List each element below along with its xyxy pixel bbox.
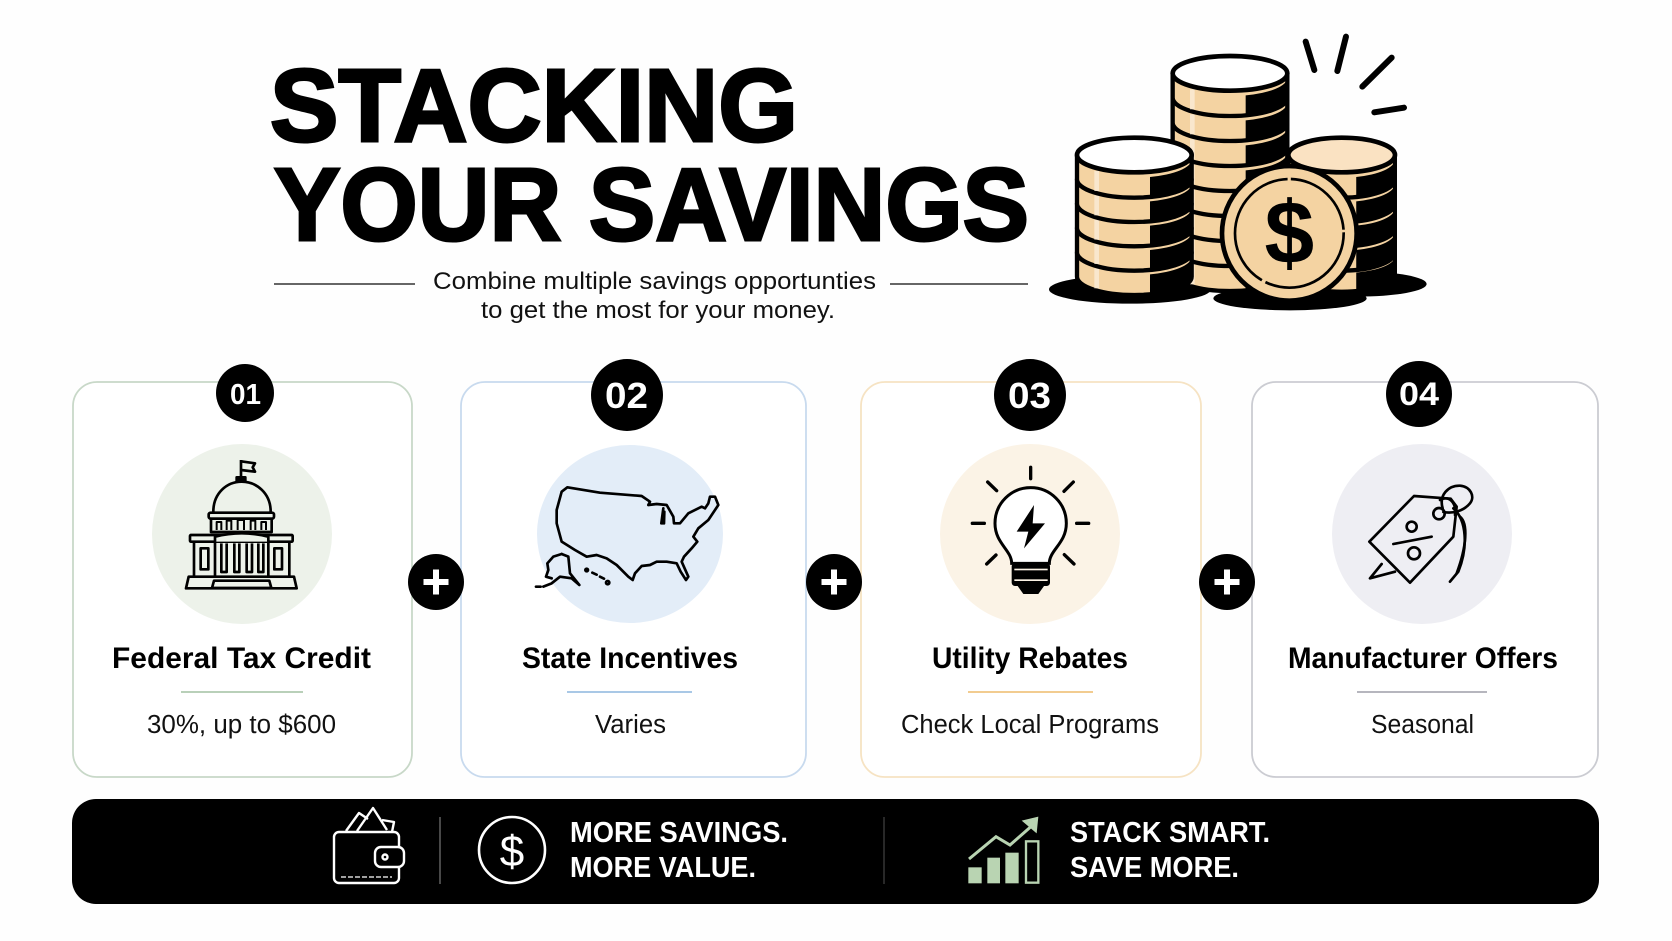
panel: Utility Rebates: [861, 359, 1201, 777]
slogan: stack smart: [1070, 817, 1270, 884]
icon: dollar circle: $: [500, 827, 524, 876]
number badge 01: 01: [230, 379, 261, 411]
card title: Federal Tax Credit: [112, 642, 371, 675]
plus connector 2: [806, 554, 862, 610]
icon: capitol building: [152, 444, 332, 624]
icon: wallet: [334, 808, 404, 883]
divider: [181, 691, 303, 693]
panel: State Incentives: [461, 359, 806, 777]
bottom banner: [72, 799, 1599, 904]
plus connector 1: [408, 554, 464, 610]
icon: coin stacks with dollar coin: [1049, 37, 1427, 310]
subtitle: to get the most for your money.: [481, 297, 835, 324]
title: [270, 48, 1029, 262]
icon: percent price tag: [1332, 444, 1512, 624]
card border: [861, 382, 1201, 777]
card border: [73, 382, 412, 777]
number badge 04: 04: [1399, 376, 1439, 412]
panel: Federal Tax Credit: [73, 364, 412, 777]
number badge 02: 02: [605, 375, 648, 416]
icon: US map: [536, 445, 723, 623]
slogan: more savings: MORE VALUE.: [570, 852, 756, 884]
card border: [461, 382, 806, 777]
card value: Seasonal: [1371, 711, 1474, 739]
divider: [567, 691, 692, 693]
divider: [968, 691, 1093, 693]
number badge 02: [591, 359, 663, 431]
icon: dollar circle: [479, 817, 545, 883]
slogan: stack smart: SAVE MORE.: [1070, 852, 1239, 884]
panel: Manufacturer Offers: [1252, 361, 1598, 777]
banner background: [72, 799, 1599, 904]
title: STACKING: [270, 48, 798, 163]
slogan: more savings: MORE SAVINGS.: [570, 817, 788, 849]
subtitle: [274, 268, 1028, 324]
card value: 30%, up to $600: [147, 711, 336, 739]
subtitle: Combine multiple savings opportunties: [433, 268, 876, 295]
slogan: more savings: [570, 817, 788, 884]
card value: Check Local Programs: [901, 711, 1159, 739]
card value: Varies: [595, 711, 666, 739]
icon: coin stacks with dollar coin: $: [1264, 182, 1314, 282]
divider: [1357, 691, 1487, 693]
number badge 03: [994, 359, 1066, 431]
card border: [1252, 382, 1598, 777]
card title: Manufacturer Offers: [1288, 642, 1558, 675]
card title: State Incentives: [522, 642, 738, 675]
icon: growth chart: [968, 817, 1038, 883]
icon: light bulb with bolt: [940, 444, 1120, 624]
slogan: stack smart: STACK SMART.: [1070, 817, 1270, 849]
title: YOUR SAVINGS: [274, 147, 1029, 262]
number badge 01: [216, 364, 274, 422]
plus connector 3: [1199, 554, 1255, 610]
card title: Utility Rebates: [932, 642, 1128, 675]
number badge 03: 03: [1008, 375, 1051, 416]
number badge 04: [1386, 361, 1452, 427]
